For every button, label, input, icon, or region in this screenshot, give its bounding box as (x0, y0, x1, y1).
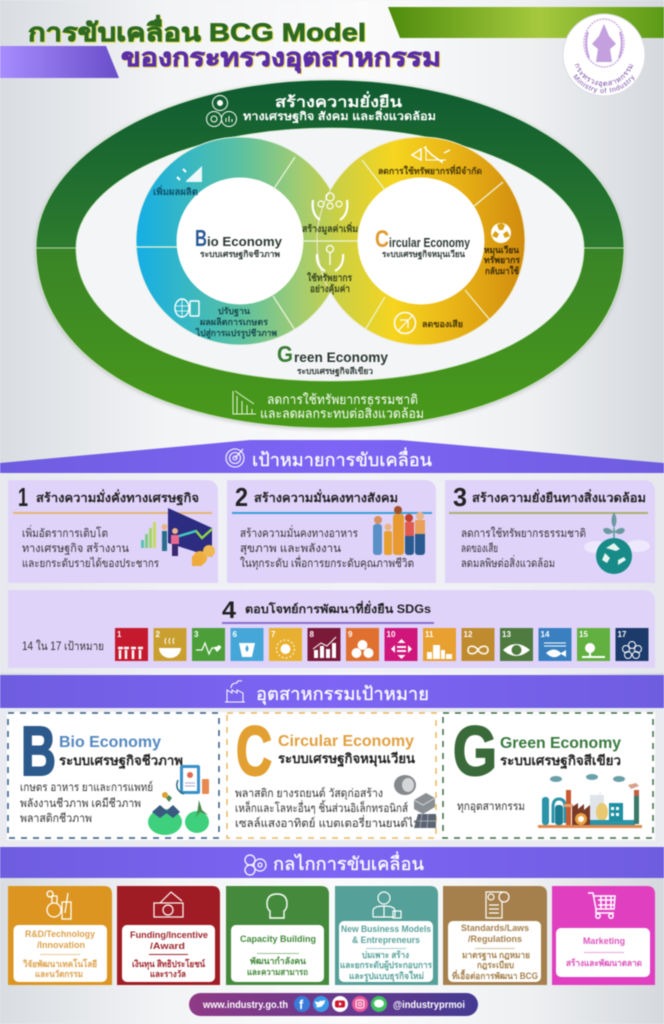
SDG 13 tile (500, 628, 533, 661)
top band: sustainability: สร้างความยั่งยืน (275, 91, 403, 111)
icon: gears (245, 855, 266, 875)
panel: Circular Economy industries: C (236, 712, 272, 790)
panel: Bio Economy industries: พลังงานชีวภาพ เคมีชีวภาพ (20, 797, 141, 810)
top band: sustainability (36, 80, 624, 248)
SDG 12 tile: 12 (464, 630, 473, 639)
card: Capacity Building: และความสามารถ (247, 967, 308, 977)
illustration: medicine and bio-energy (148, 765, 209, 835)
panel: goal 2 society: 2 (235, 482, 248, 512)
panel: goal 2 society: ในทุกระดับ เพื่อการยกระดับคุณภาพชีวิต (240, 555, 414, 570)
panel: goal 2 society: สร้างความมั่นคงทางอาหาร (240, 525, 358, 540)
panel: Circular Economy industries: เหล็กและโลหะอื่นๆ ชิ้นส่วนอิเล็กทรอนิกส์ (235, 800, 408, 815)
card: New Business Models: New Business Models (341, 924, 431, 935)
card: New Business Models: บ่มเพาะ สร้าง (362, 950, 409, 960)
card: Capacity Building (226, 886, 329, 985)
logo: Ministry of Industry: กระทรวงอุตสาหกรรม (574, 63, 634, 88)
card: Standards: กฎระเบียบ (477, 960, 514, 970)
Bio Economy center label: B (195, 225, 207, 251)
icon: business person (373, 892, 401, 918)
segment: upgrade agricultural products (175, 299, 277, 339)
panel: goal 4 SDGs: ตอบโจทย์การพัฒนาที่ยั่งยืน SDGs (245, 600, 431, 616)
card: Marketing: Marketing (583, 936, 625, 947)
panel: Green Economy industries: Green Economy (500, 735, 621, 752)
segment: reduce waste (394, 312, 463, 334)
panel: Circular Economy industries: พลาสติก ยางรถยนต์ วัสดุก่อสร้าง (235, 786, 383, 800)
panel: goal 3 environment: ลดการใช้ทรัพยากรธรรมชาติ (461, 527, 586, 540)
icon: facebook: f (299, 997, 304, 1012)
purple banner left (0, 46, 119, 78)
segment: upgrade agricultural products: ผลผลิตการเกษตร (200, 317, 268, 327)
card: New Business Models: และยกระดับผู้ประกอบการ (340, 960, 432, 971)
illustration: materials (394, 775, 436, 828)
card: Standards (443, 886, 547, 985)
SDG 10 tile: 10 (386, 630, 396, 639)
section header: goals: เป้าหมายการขับเคลื่อน (252, 447, 432, 470)
card: Funding: และรางวัล (150, 969, 186, 979)
segment: use resources efficiently: ใช้ทรัพยากร (307, 272, 353, 284)
panel: Green Economy industries: ทุกอุตสาหกรรม (457, 801, 525, 813)
segment: recycle resources: กลับมาใช้ (485, 265, 519, 276)
illustration: recycling globe with sprout (584, 512, 650, 574)
panel: goal 2 society (227, 480, 436, 583)
top band: sustainability: ทางเศรษฐกิจ สังคม และสิ่งแวดล้อม (243, 108, 436, 124)
SDG 3 tile (192, 628, 225, 661)
panel: Green Economy industries (443, 712, 653, 838)
section header: target industries: อุตสาหกรรมเป้าหมาย (256, 684, 429, 705)
title: การขับเคลื่อน BCG Model (28, 15, 366, 47)
panel: goal 3 environment: ลดของเสีย (461, 542, 498, 555)
card: Funding (117, 886, 220, 985)
icon: youtube (332, 996, 348, 1012)
card: R&D: /Innovation (37, 940, 85, 951)
SDG 11 tile: 11 (425, 630, 434, 639)
SDG 3 tile: 3 (194, 630, 199, 639)
panel: goal 2 society: สร้างความมั่นคงทางสังคม (254, 489, 398, 505)
icon: factory (225, 681, 245, 702)
SDG 7 tile (269, 628, 302, 661)
SDG 6 tile: 6 (232, 630, 238, 639)
section header: goals (0, 440, 664, 473)
card: New Business Models: & Entrepreneurs (352, 935, 420, 946)
card: Standards: ที่เอื้อต่อการพัฒนา BCG (452, 969, 538, 981)
panel: goal 1 economy: 1 (18, 482, 28, 512)
title: ของกระทรวงอุตสาหกรรม (121, 44, 441, 74)
icon: money (154, 892, 183, 917)
SDG 10 tile (384, 628, 418, 661)
card: Marketing: สร้างและพัฒนาตลาด (566, 958, 642, 968)
icon: three pillars (206, 96, 236, 126)
footer contact pill: www.industry.go.th (202, 1000, 288, 1011)
Circular Economy center label: C (375, 226, 389, 253)
section header: target industries (0, 675, 664, 708)
SDG 11 tile (423, 628, 456, 661)
icon: lab flasks (47, 891, 71, 919)
segment: reduce limited resources: ลดการใช้ทรัพยากรที่มีจำกัด (378, 164, 482, 176)
icon: shopping cart (588, 893, 615, 918)
card: Standards: Standards/Laws (461, 923, 529, 934)
segment: use resources efficiently: อย่างคุ้มค่า (310, 283, 350, 295)
panel: Circular Economy industries: ระบบเศรษฐกิจหมุนเวียน (278, 751, 415, 768)
icon: declining bars (233, 391, 256, 414)
SDG 9 tile (346, 628, 379, 661)
panel: Circular Economy industries (227, 712, 436, 838)
panel: Circular Economy industries: Circular Economy (278, 733, 414, 750)
SDG 1 tile (115, 628, 148, 661)
panel: Bio Economy industries (8, 712, 219, 838)
panel: goal 3 environment: สร้างความยั่งยืนทางสิ่งแวดล้อม (472, 489, 646, 505)
card: New Business Models (335, 886, 438, 985)
Green Economy label: reen Economy (294, 349, 388, 365)
panel: goal 1 economy: สร้างความมั่งคั่งทางเศรษฐกิจ (36, 489, 199, 506)
panel: goal 1 economy: เพิ่มอัตราการเติบโต (22, 525, 108, 540)
SDG 8 tile: 8 (310, 630, 314, 639)
segment: reduce limited resources (378, 146, 482, 176)
icon: target (226, 449, 244, 467)
icon: line (371, 996, 387, 1012)
segment: use resources efficiently (307, 246, 353, 295)
panel: goal 3 environment (445, 480, 655, 583)
card: R&D: วิจัยพัฒนาเทคโนโลยี (22, 958, 97, 969)
card: R&D (8, 886, 112, 985)
bottom band: reduce resource use (36, 248, 624, 428)
bottom band: reduce resource use: และลดผลกระทบต่อสิ่งแวดล้อม (260, 405, 424, 421)
card: Standards: /Regulations (468, 934, 522, 945)
Circular Economy center label: ระบบเศรษฐกิจหมุนเวียน (382, 249, 465, 260)
panel: Bio Economy industries: เกษตร อาหาร ยาและการแพทย์ (20, 780, 153, 794)
Bio Economy center label (195, 225, 283, 260)
SDG 13 tile: 13 (502, 630, 511, 639)
illustration: industrial city (538, 774, 642, 828)
segment: increase yield (153, 166, 202, 198)
panel: goal 3 environment: 3 (453, 482, 467, 512)
segment: recycle resources (484, 223, 520, 276)
card: Marketing (552, 886, 655, 985)
SDG 17 tile (616, 628, 648, 661)
panel: Bio Economy industries: พลาสติกชีวภาพ (20, 812, 92, 825)
icon: facebook (294, 996, 310, 1012)
panel: Bio Economy industries: B (21, 712, 56, 790)
panel: Green Economy industries: ระบบเศรษฐกิจสีเขียว (500, 753, 621, 770)
SDG 1 tile: 1 (117, 630, 122, 639)
panel: goal 4 SDGs (8, 590, 655, 668)
infinity ring (135, 137, 525, 345)
panel: goal 2 society: สุขภาพ และพลังงาน (240, 543, 341, 555)
panel: Green Economy industries: G (453, 712, 497, 790)
Green Economy label: ระบบเศรษฐกิจสีเขียว (297, 366, 373, 377)
bottom band: reduce resource use: ลดการใช้ทรัพยากรธรรมชาติ (267, 392, 418, 407)
illustration: family (373, 506, 425, 555)
segment: upgrade agricultural products: ปรับฐาน (218, 306, 251, 317)
panel: Bio Economy industries: Bio Economy (59, 734, 161, 751)
panel: goal 1 economy: ทางเศรษฐกิจ สร้างงาน (22, 542, 129, 555)
SDG 9 tile: 9 (348, 630, 353, 639)
logo: Ministry of Industry: Ministry of Industry (572, 74, 636, 94)
eye diagram (36, 80, 624, 428)
SDG 7 tile: 7 (271, 630, 276, 639)
Green Economy label: G (277, 341, 293, 367)
panel: goal 1 economy: และยกระดับรายได้ของประชากร (22, 557, 159, 570)
segment: upgrade agricultural products: ไปสู่การแปรรูปชีวภาพ (195, 327, 277, 339)
card: R&D: R&D/Technology (25, 929, 96, 940)
SDG 2 tile: 2 (156, 630, 160, 639)
card: New Business Models: และรูปแบบธุรกิจใหม่ (349, 970, 424, 982)
section header: mechanisms (0, 847, 664, 878)
illustration: business chart (141, 508, 215, 566)
panel: Circular Economy industries: เซลล์แสงอาทิตย์ แบตเตอรี่ยานยนต์ไฟฟ้า (235, 815, 436, 830)
footer contact pill: @industryprmoi (393, 1000, 465, 1011)
SDG 14 tile: 14 (540, 630, 550, 639)
inner white eye (36, 80, 624, 428)
card: Funding: /Award (150, 941, 185, 952)
logo: Ministry of Industry (564, 12, 645, 96)
panel: goal 4 SDGs: 14 ใน 17 เป้าหมาย (22, 640, 104, 653)
segment: increase yield: เพิ่มผลผลิต (153, 184, 198, 198)
footer contact pill (189, 993, 478, 1016)
section header: mechanisms: กลไกการขับเคลื่อน (273, 851, 424, 874)
panel: Bio Economy industries: ระบบเศรษฐกิจชีวภาพ (59, 753, 183, 770)
Green Economy label (277, 341, 388, 377)
segment: recycle resources: หมุนเวียน (484, 245, 520, 256)
card: Funding: Funding/Incentive (130, 930, 208, 941)
SDG 17 tile: 17 (618, 630, 627, 639)
SDG 15 tile: 15 (579, 630, 588, 639)
SDG 14 tile (538, 628, 572, 661)
Bio Economy center label: ระบบเศรษฐกิจชีวภาพ (200, 249, 280, 260)
panel: goal 1 economy (8, 480, 218, 583)
icon: instagram (352, 996, 368, 1012)
segment: reduce waste: ลดของเสีย (422, 319, 463, 329)
SDG 6 tile (230, 628, 264, 661)
Bio Economy center label: io Economy (207, 234, 283, 249)
title (28, 15, 441, 74)
panel: goal 4 SDGs: 4 (222, 597, 237, 624)
panel: goal 3 environment: ลดมลพิษต่อสิ่งแวดล้อม (461, 555, 555, 570)
SDG 8 tile (308, 628, 340, 661)
Circular Economy center label (375, 226, 470, 260)
SDG 15 tile (577, 628, 610, 661)
segment: value creation: สร้างมูลค่าเพิ่ม (302, 221, 358, 236)
icon: head with gear (267, 894, 287, 918)
light band behind goal cards (0, 473, 664, 673)
icon: document with gear (486, 892, 509, 918)
card: Standards: มาตรฐาน กฎหมาย (462, 950, 530, 961)
Circular Economy center label: ircular Economy (389, 236, 470, 250)
panel backing (0, 708, 664, 847)
card: Funding: เงินทุน สิทธิประโยชน์ (132, 958, 206, 970)
SDG 12 tile (462, 628, 494, 661)
card: R&D: และนวัตกรรม (35, 969, 83, 979)
icon: twitter (313, 996, 329, 1012)
green banner top right (388, 7, 664, 38)
segment: recycle resources: ทรัพยากร (484, 255, 520, 265)
SDG 2 tile (154, 628, 186, 661)
segment: value creation (302, 193, 358, 236)
card: Capacity Building: Capacity Building (240, 934, 316, 945)
card: Capacity Building: พัฒนากำลังคน (250, 956, 307, 966)
